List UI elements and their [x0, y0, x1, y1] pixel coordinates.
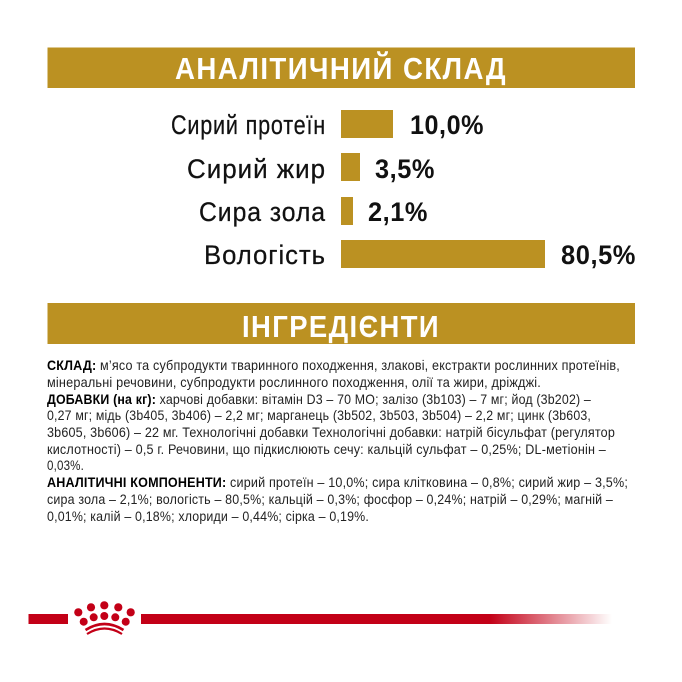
- heading: analytical composition: АНАЛІТИЧНИЙ СКЛАД: [175, 50, 507, 86]
- icon: royal crown logo: [74, 601, 135, 634]
- row: crude protein: [171, 110, 484, 140]
- bar chart: analytical composition: [171, 110, 636, 270]
- row: moisture: 80,5%: [561, 240, 636, 270]
- text block: ingredients: мінеральні речовини, субпродукти рослинного походження, олії та жири, дріжджі.: [47, 374, 541, 390]
- panel: ingredients header: [48, 303, 635, 344]
- row: crude protein: 10,0%: [410, 110, 484, 140]
- row: moisture: Вологість: [204, 240, 326, 270]
- text block: ingredients: кислотності) – 0,5 г. Речовини, що підкислюють сечу: кальцій сульфат – 0,25%; DL-метіонін –: [47, 441, 606, 457]
- footer ribbon left: [28, 614, 68, 624]
- row: crude ash: Сира зола: [199, 197, 326, 227]
- text block: ingredients: 3b605, 3b606) – 22 мг. Технологічні добавки Технологічні добавки: натрій бісульфат (регулятор: [47, 424, 615, 440]
- panel: analytical composition header: [48, 48, 635, 88]
- row: crude ash: [199, 197, 428, 227]
- text block: ingredients: 0,03%.: [47, 457, 84, 473]
- text block: ingredients: сира зола – 2,1%; вологість – 80,5%; кальцій – 0,3%; фосфор – 0,24%; натрій – 0,29%; магній –: [47, 491, 613, 507]
- row: crude fat: Сирий жир: [187, 154, 326, 184]
- row: crude ash: 2,1%: [368, 197, 428, 227]
- row: crude fat: [187, 153, 435, 184]
- heading: ingredients: ІНГРЕДІЄНТИ: [242, 309, 440, 344]
- row: crude protein: Сирий протеїн: [171, 110, 326, 140]
- row: crude fat: 3,5%: [375, 154, 435, 184]
- text block: ingredients: СКЛАД: м’ясо та субпродукти тваринного походження, злакові, екстракти рослинних протеїнів,: [47, 357, 620, 373]
- text block: ingredients: ДОБАВКИ (на кг): харчові добавки: вітамін D3 – 70 МО; залізо (3b103) – 7 мг; йод (3b202) –: [47, 391, 591, 407]
- text block: ingredients: АНАЛІТИЧНІ КОМПОНЕНТИ: сирий протеїн – 10,0%; сира клітковина – 0,8%; сирий жир – 3,5%;: [47, 474, 628, 490]
- text block: ingredients: [47, 357, 628, 524]
- text block: ingredients: 0,01%; калій – 0,18%; хлориди – 0,44%; сірка – 0,19%.: [47, 508, 369, 524]
- text block: ingredients: 0,27 мг; мідь (3b405, 3b406) – 2,2 мг; марганець (3b502, 3b503, 3b504) – 2,2 мг; цинк (3b603,: [47, 407, 591, 423]
- row: moisture: [204, 240, 636, 270]
- footer ribbon right: [141, 614, 612, 624]
